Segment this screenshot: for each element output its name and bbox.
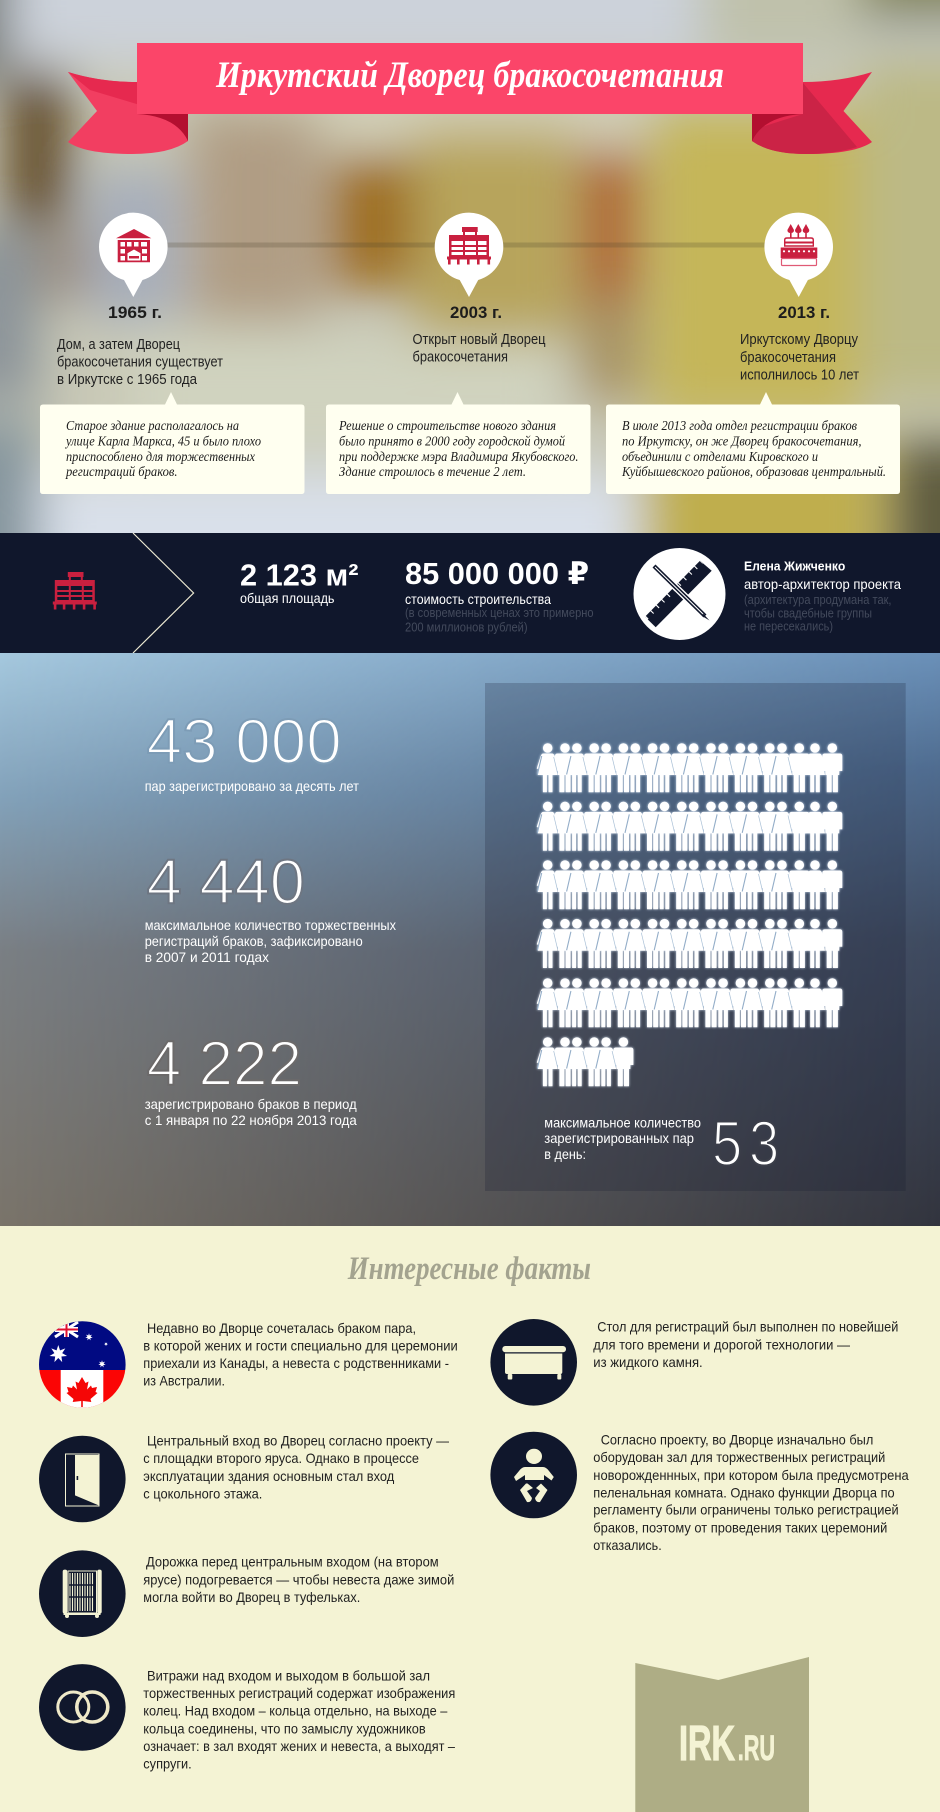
icon: Australia and Canada flags (39, 1320, 126, 1409)
fact 6 text: Согласно проекту, во Дворце изначально был (601, 1432, 873, 1448)
card text: Здание строилось в течение 2 лет. (339, 464, 526, 479)
stat: 4 440 registrations: регистраций браков, зафиксировано (145, 933, 363, 949)
fact 3 text: могла войти во Дворец в туфельках. (143, 1589, 360, 1605)
pin (435, 213, 503, 297)
fact 1 text: приехали из Канады, а невеста с родственниками - (143, 1355, 449, 1371)
fact 4 text: Витражи над входом и выходом в большой зал (147, 1667, 430, 1683)
stat: 4 222 registrations: 4 222 (147, 1029, 302, 1099)
card text: приспособлено для торжественных (66, 449, 255, 464)
architect text: чтобы свадебные группы (744, 606, 872, 620)
panel: interesting facts (39, 1256, 909, 1812)
card text (64, 418, 261, 479)
card text: объединили с отделами Кировского и (622, 449, 818, 464)
card text: Куйбышевского районов, образовав центральный. (621, 464, 886, 479)
stat: cost: стоимость строительства (405, 591, 551, 607)
callout card 3 (606, 392, 900, 494)
pin (99, 213, 168, 297)
right ribbon tail (752, 72, 872, 154)
architect text: не пересекались) (744, 619, 833, 634)
card text: регистраций браков. (65, 464, 178, 479)
description: бракосочетания (412, 350, 508, 366)
fact 2 text: с цокольного этажа. (143, 1485, 262, 1501)
fact 4 text: означает: в зал входят жених и невеста, а выходят – (143, 1738, 455, 1754)
card text: улице Карла Маркса, 45 и было плохо (64, 434, 261, 448)
number 53: 5 (712, 1109, 742, 1179)
logo text: .RU (738, 1729, 775, 1768)
fact 2 text (143, 1432, 449, 1501)
fact 4 text (143, 1667, 455, 1772)
number 53: 3 (749, 1109, 779, 1179)
callout card 2 (326, 392, 590, 494)
fact 2 text: с площадки второго яруса. Однако в процессе (143, 1450, 419, 1466)
fact 6 text: оборудован зал для торжественных регистраций (593, 1449, 885, 1465)
caption: максимальное количество (544, 1115, 701, 1131)
panel: dark stats band (0, 533, 940, 653)
icon: cake (781, 224, 817, 266)
fact 5 text: из жидкого камня. (593, 1354, 703, 1370)
banner face (137, 43, 803, 114)
fact 3 text: Дорожка перед центральным входом (на втором (146, 1554, 439, 1570)
fact 1 text: из Австралии. (143, 1372, 225, 1388)
fact 6 text: пеленальная комната. Однако функции Дворца по (593, 1484, 895, 1500)
description: Иркутскому Дворцу (740, 332, 859, 348)
icon: table (490, 1319, 577, 1406)
stat: 4 222 registrations: зарегистрировано браков в период (145, 1096, 357, 1112)
card text: Старое здание располагалось на (66, 418, 239, 433)
stat: cost: 200 миллионов рублей) (405, 620, 528, 635)
pictogram: 53 couples (537, 743, 842, 1086)
stat: cost: (в современных ценах это примерно (405, 605, 594, 620)
heading: Интересные факты (347, 1251, 591, 1287)
stat: 4 222 registrations: с 1 января по 22 ноября 2013 года (145, 1112, 357, 1128)
fact 6 text (593, 1432, 909, 1553)
icon: heated walkway radiator (39, 1550, 126, 1637)
card text (338, 418, 578, 479)
panel: blurred photo hero background (0, 0, 940, 533)
card text: при поддержке мэра Владимира Якубовского. (339, 449, 578, 464)
architect text: (архитектура продумана так, (744, 592, 892, 607)
fact 6 text: браков, поэтому от проведения таких церемоний (593, 1520, 887, 1536)
ribbon banner with title (68, 43, 872, 154)
fact 4 text: кольца соединены, что по замыслу художников (143, 1720, 426, 1736)
fact 3 text: ярусе) подогревается — чтобы невеста даже зимой (143, 1572, 454, 1588)
panel: pictogram of couples per day (485, 683, 906, 1191)
description: Открыт новый Дворец (412, 332, 546, 348)
callout card 1 (40, 392, 304, 494)
stat: 43 000 couples: пар зарегистрировано за десять лет (145, 778, 360, 794)
fact 5 text: Стол для регистраций был выполнен по новейшей (597, 1319, 898, 1335)
stat: area: общая площадь (240, 590, 334, 606)
year: 2003 г. (450, 303, 502, 322)
icon: building (53, 572, 97, 610)
stat: cost: 85 000 000 ₽ (405, 556, 589, 591)
stat: cost (405, 556, 594, 635)
stat: 4 440 registrations: в 2007 и 2011 годах (145, 949, 269, 965)
icon: new palace (447, 227, 491, 264)
panel: statistics section background (0, 653, 940, 1226)
fact 6 text: регламенту были ограничены только регистрацией (593, 1502, 899, 1518)
fact 5 text: для того времени и дорогой технологии — (593, 1336, 850, 1352)
year: 2013 г. (778, 303, 830, 322)
stat: 4 440 registrations: максимальное количество торжественных (145, 917, 396, 933)
icon: wedding rings (39, 1664, 126, 1751)
architect text (744, 559, 901, 634)
stat: 43 000 couples: 43 000 (147, 707, 342, 777)
description (57, 337, 223, 388)
fact 5 text (593, 1319, 898, 1370)
caption: зарегистрированных пар (544, 1130, 694, 1146)
pin (764, 213, 833, 297)
fact 4 text: супруги. (143, 1756, 192, 1772)
description: исполнилось 10 лет (740, 368, 859, 384)
logo text: IRK (679, 1717, 735, 1771)
architect text: автор-архитектор проекта (744, 576, 901, 592)
card text (621, 418, 886, 479)
stat: 4 222 registrations (145, 1029, 357, 1128)
left ribbon tail (68, 72, 188, 154)
fact 6 text: новорожденнных, при котором была предусмотрена (593, 1467, 909, 1483)
arrow chevron (133, 533, 194, 653)
stat: area: 2 123 м² (240, 558, 358, 592)
description: бракосочетания существует (57, 354, 223, 370)
fact 2 text: Центральный вход во Дворец согласно проекту — (147, 1432, 449, 1448)
icon: door (39, 1436, 126, 1522)
fact 6 text: отказались. (593, 1537, 662, 1553)
timeline connector line (165, 242, 800, 248)
icon: old building (116, 229, 151, 262)
icon: ruler and pencil (634, 548, 726, 640)
icon: baby (490, 1432, 577, 1518)
fact 4 text: колец. Над входом – кольца отдельно, на выходе – (143, 1702, 447, 1718)
description (412, 332, 546, 366)
description: бракосочетания (740, 350, 836, 366)
fact 1 text: Недавно во Дворце сочеталась браком пара, (147, 1320, 416, 1336)
caption (544, 1115, 701, 1162)
timeline item: 2013 (740, 213, 859, 384)
card text: В июле 2013 года отдел регистрации браков (622, 418, 857, 433)
fact 3 text (143, 1554, 454, 1605)
timeline item: 1965 (57, 213, 223, 388)
fact 4 text: торжественных регистраций содержат изображения (143, 1685, 455, 1701)
caption: в день: (544, 1146, 586, 1162)
logo ribbon (635, 1657, 809, 1812)
fact 1 text: в которой жених и гости специально для церемонии (143, 1338, 458, 1354)
title: Иркутский Дворец бракосочетания (215, 55, 724, 96)
stat: 4 440 registrations (145, 848, 396, 965)
fact 2 text: эксплуатации здания основным стал вход (143, 1468, 394, 1484)
architect text: Елена Жижченко (744, 559, 845, 574)
year: 1965 г. (108, 303, 162, 322)
card text: по Иркутску, он же Дворец бракосочетания, (622, 434, 862, 448)
card text: было принято в 2000 году городской думой (339, 434, 565, 448)
stat: 4 440 registrations: 4 440 (147, 848, 305, 918)
description (740, 332, 859, 384)
description: в Иркутске с 1965 года (57, 372, 198, 388)
card text: Решение о строительстве нового здания (338, 418, 556, 433)
description: Дом, а затем Дворец (57, 337, 180, 353)
timeline item: 2003 (412, 213, 546, 366)
fact 1 text (143, 1320, 458, 1388)
